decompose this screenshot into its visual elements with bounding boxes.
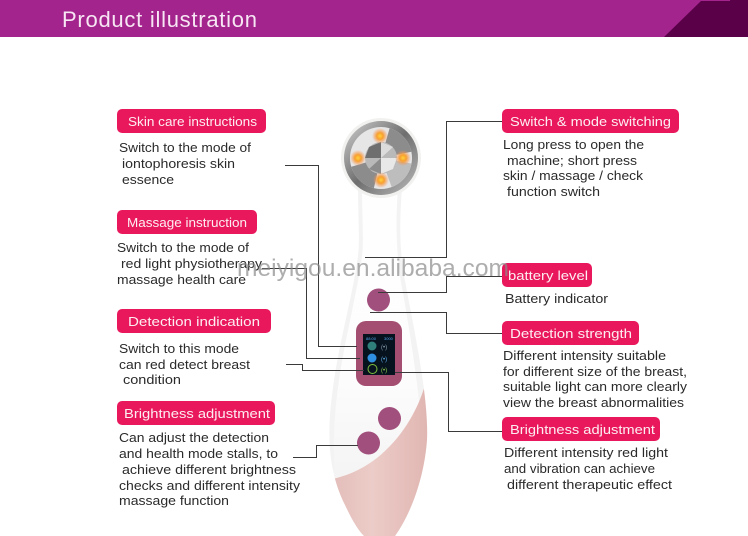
panel: brightness adjustment left: checks and different intensity — [119, 478, 301, 493]
panel: detection indication — [117, 309, 271, 387]
header banner — [0, 0, 748, 37]
panel: detection indication: Detection indication — [128, 314, 260, 329]
device body — [330, 191, 428, 536]
panel: massage instruction — [117, 210, 263, 287]
panel: battery level — [502, 263, 609, 306]
device head — [340, 118, 421, 198]
panel: brightness adjustment left: and health mode stalls, to — [119, 446, 278, 461]
panel: switch and mode switching: function switch — [507, 184, 600, 199]
device illustration — [330, 118, 428, 536]
panel: detection strength — [502, 321, 688, 410]
LED lights — [350, 128, 411, 188]
panel: switch and mode switching: Long press to open the — [503, 137, 644, 152]
panel: brightness adjustment left: massage function — [119, 493, 229, 508]
panel: detection strength: Detection strength — [510, 326, 632, 341]
panel: detection strength: for different size of the breast, — [503, 364, 687, 379]
panel: brightness adjustment right: and vibration can achieve — [504, 461, 655, 476]
panel: brightness adjustment left: achieve different brightness — [122, 462, 297, 477]
panel: skin care instructions: essence — [122, 172, 174, 187]
control panel: 88:00 — [366, 336, 377, 341]
panel: switch and mode switching: skin / massage / check — [503, 168, 644, 183]
panel: skin care instructions — [117, 109, 266, 187]
panel: brightness adjustment right: Brightness adjustment — [510, 422, 655, 437]
panel: brightness adjustment right: different therapeutic effect — [507, 477, 672, 492]
panel: skin care instructions: Switch to the mode of — [119, 140, 251, 155]
panel: brightness adjustment right: Different intensity red light — [504, 445, 668, 460]
panel: detection strength: Different intensity suitable — [503, 348, 666, 363]
panel: brightness adjustment left — [117, 401, 301, 508]
panel: switch and mode switching: Switch & mode switching — [510, 114, 671, 129]
panel: detection indication: Switch to this mode — [119, 341, 239, 356]
panel: massage instruction: red light physiotherapy — [121, 256, 263, 271]
panel: massage instruction: Massage instruction — [127, 215, 247, 230]
control panel: (•) — [381, 345, 387, 351]
control panel: (•) — [381, 357, 387, 363]
title: Product illustration — [62, 7, 257, 32]
panel: massage instruction: massage health care — [117, 272, 246, 287]
panel: massage instruction: Switch to the mode of — [117, 240, 249, 255]
control panel — [356, 321, 402, 386]
panel: battery level: Battery indicator — [505, 291, 609, 306]
panel: skin care instructions: iontophoresis skin — [122, 156, 235, 171]
watermark: meiyigou.en.alibaba.com — [237, 255, 509, 282]
lower button one — [378, 407, 401, 430]
banner dark corner — [664, 0, 748, 37]
control panel: 3000 — [384, 336, 394, 341]
panel: detection indication: condition — [123, 372, 181, 387]
panel: detection strength: suitable light can more clearly — [503, 379, 688, 394]
panel: battery level: battery level — [508, 268, 588, 283]
panel: brightness adjustment right — [502, 417, 672, 492]
control panel: (•) — [381, 368, 387, 374]
top button — [367, 288, 390, 312]
connector lines — [262, 122, 502, 458]
panel: switch and mode switching: machine; short press — [507, 153, 638, 168]
panel: skin care instructions: Skin care instructions — [128, 114, 258, 129]
panel: brightness adjustment left: Can adjust the detection — [119, 430, 269, 445]
panel: detection indication: can red detect breast — [119, 357, 250, 372]
panel: switch and mode switching — [502, 109, 679, 199]
panel: detection strength: view the breast abnormalities — [503, 395, 685, 410]
panel: brightness adjustment left: Brightness adjustment — [124, 406, 270, 421]
lower button two — [357, 432, 380, 454]
